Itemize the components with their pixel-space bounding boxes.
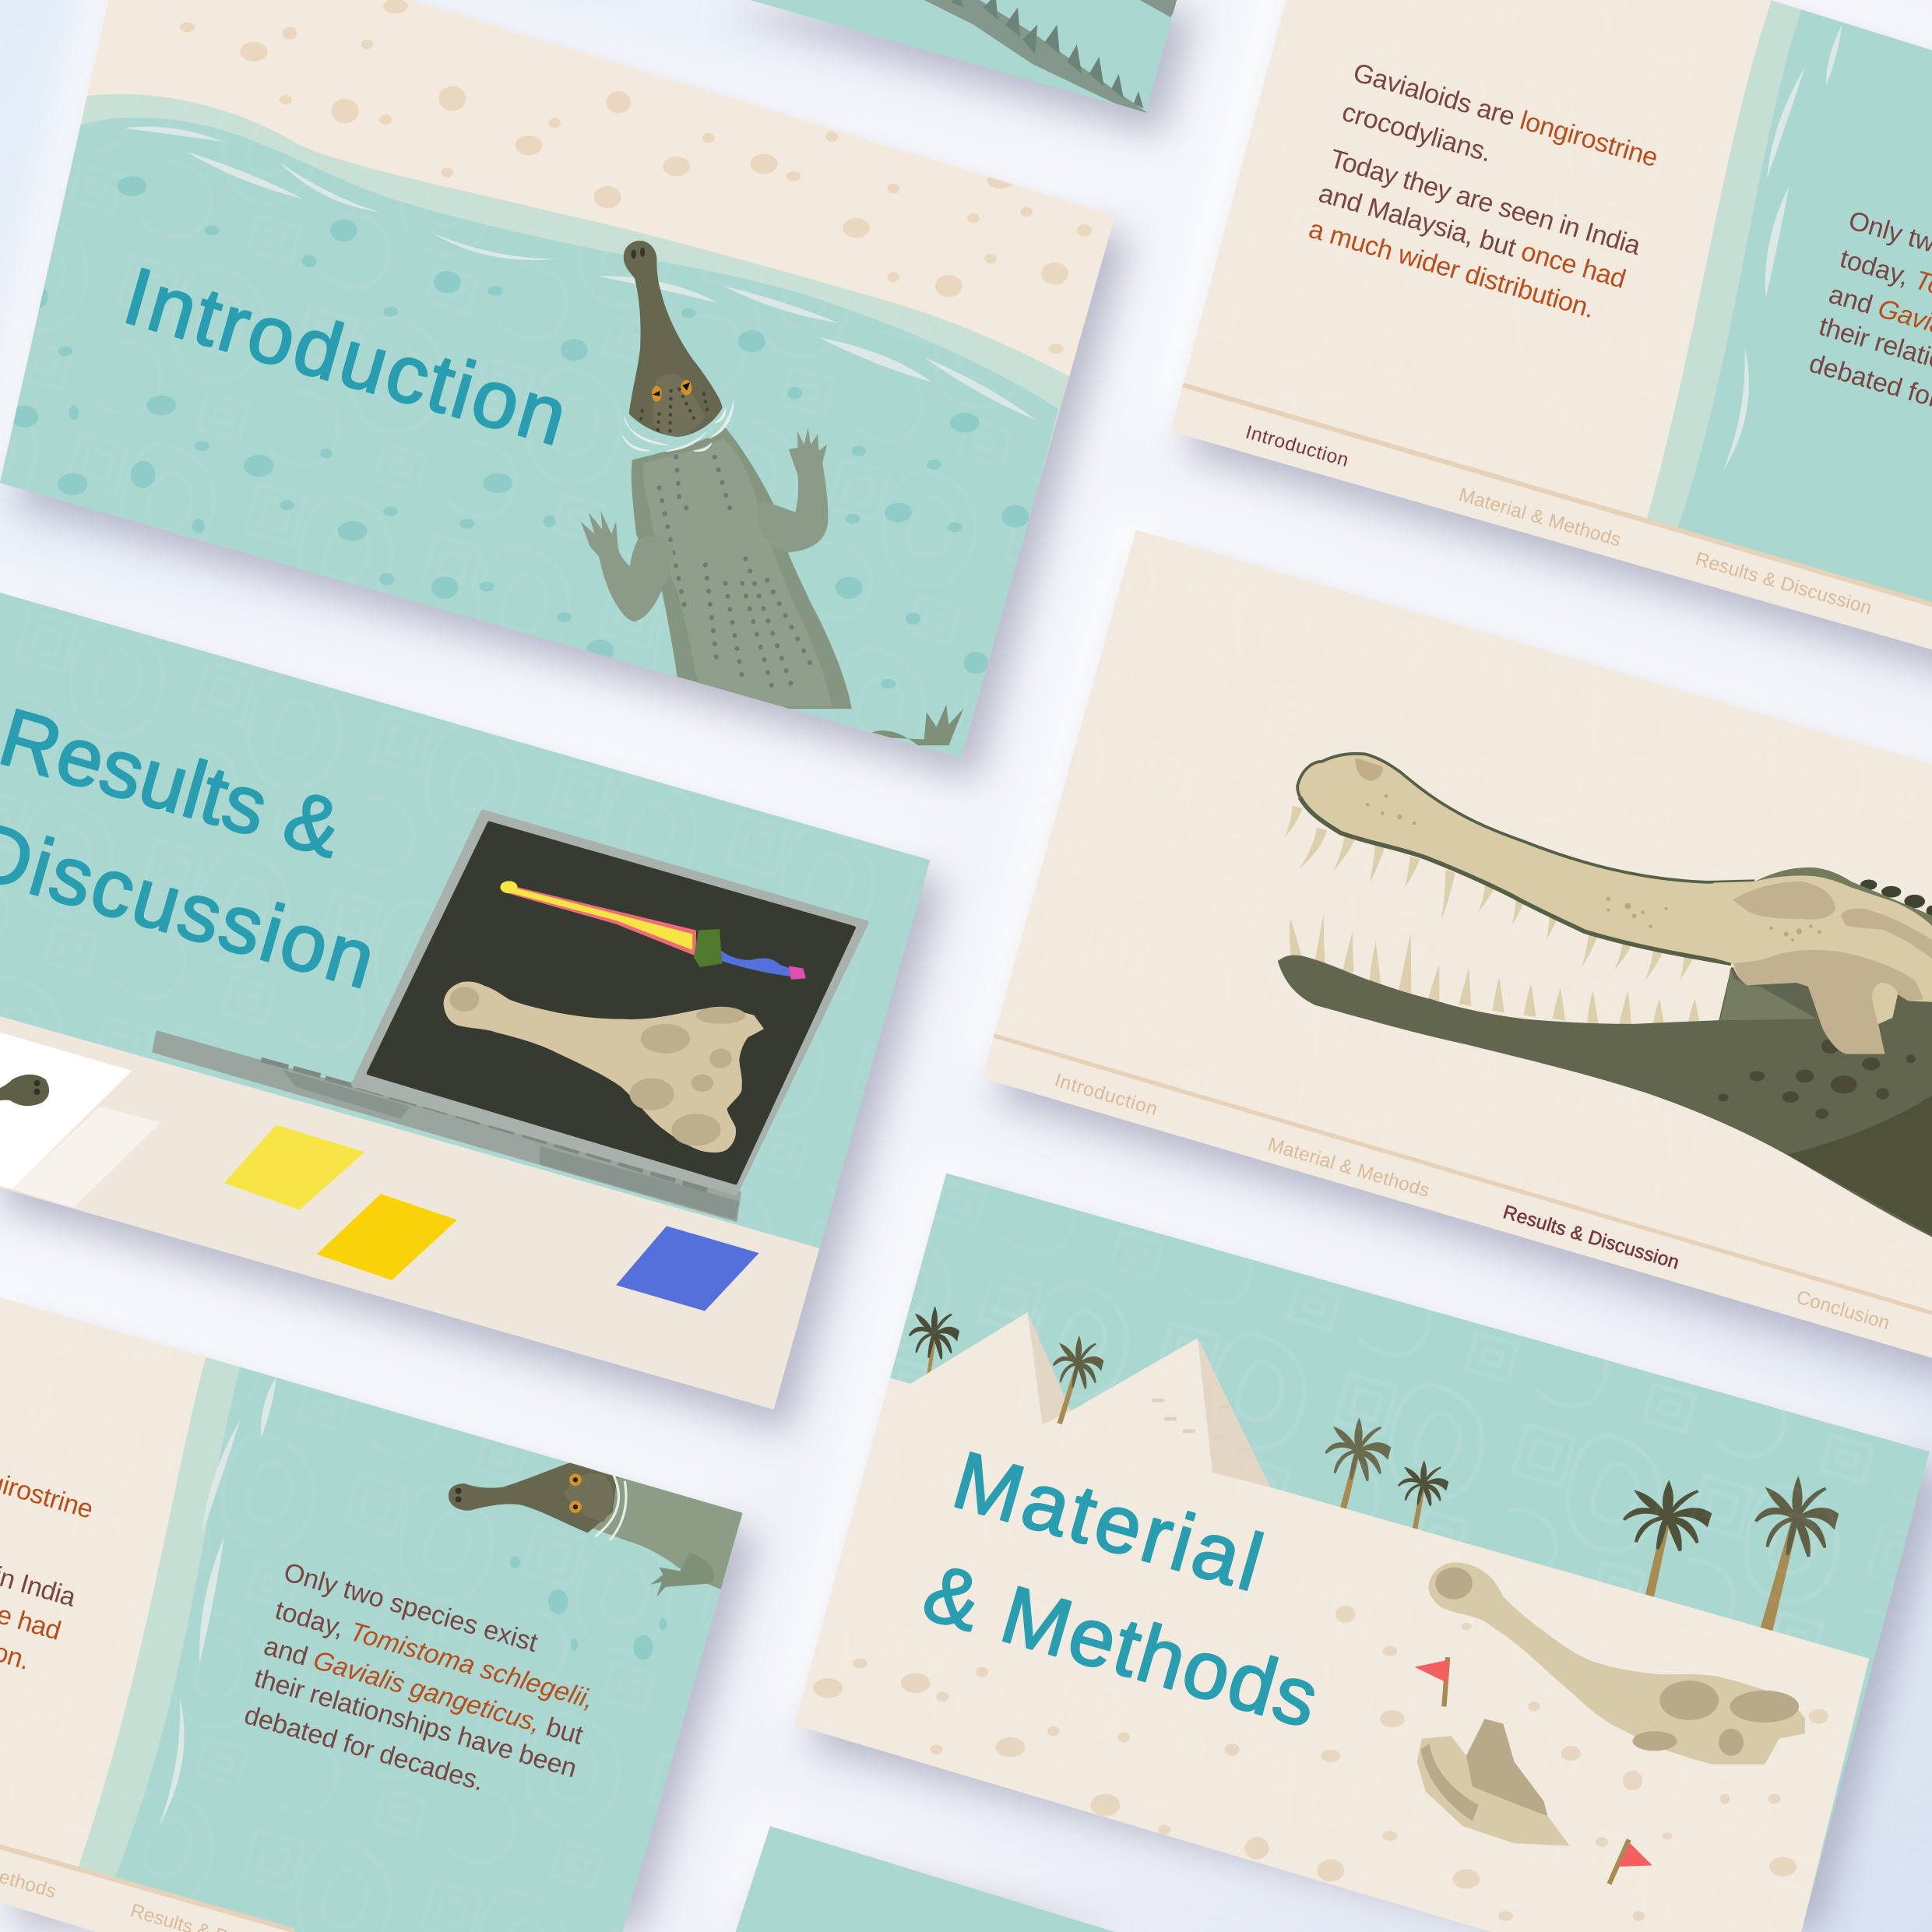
slide: Two species text: [0, 1287, 764, 1932]
illustration: rear foot: [863, 705, 963, 745]
palm tree in front of pyramids: [1054, 1338, 1103, 1424]
flag: left: [1414, 1657, 1449, 1706]
illustration: gharial head: [449, 1462, 743, 1597]
scutes: [1860, 880, 1932, 917]
small bone: [1417, 1719, 1570, 1846]
colour swatch: gold: [317, 1194, 457, 1280]
colour swatch: yellow: [224, 1125, 364, 1210]
illustration: swimming gharial: [581, 241, 852, 709]
footer navigation: [992, 1035, 1932, 1334]
laptop screen: [368, 823, 854, 1183]
arm: left: [581, 511, 673, 621]
slide: bottom sliver: [736, 1826, 1115, 1932]
water: [1644, 0, 1932, 690]
upper jaw: [1297, 754, 1774, 973]
text block: two species: [241, 1557, 597, 1797]
water ripples: [1723, 25, 1842, 472]
footer navigation: Introduction: [1052, 1070, 1160, 1120]
footer navigation: Material & Methods: [1265, 1134, 1432, 1202]
slide: Introduction: [0, 0, 1134, 776]
text block: left: Gavialoids are longirostrine: [1350, 58, 1661, 173]
palm trees: [910, 1308, 1837, 1634]
title: Results &: [0, 691, 352, 875]
text block: left: [0, 1409, 97, 1676]
skull and neck detail: [1606, 867, 1932, 1244]
text block: right: [1806, 206, 1932, 445]
water ripples: [123, 127, 1036, 421]
water: [1, 93, 1070, 497]
text block: two species: Only two species exist: [280, 1557, 541, 1658]
footer navigation: Results & Discussion: [1693, 548, 1874, 619]
sand pebbles: [813, 1606, 1828, 1921]
sand ground: [0, 1013, 819, 1409]
text block: left: a much wider distribution.: [1306, 214, 1598, 324]
colour swatch: blue: [616, 1226, 759, 1311]
water pebbles: [11, 176, 1029, 688]
title: [0, 691, 385, 1006]
text block: two species: today, Tomistoma schlegelii,: [272, 1596, 597, 1715]
slide: Results & Discussion: [0, 579, 948, 1417]
slide: top sliver with crocodile tail: [751, 0, 1177, 114]
text block: two species: their relationships have been: [251, 1663, 580, 1783]
arm: right: [757, 428, 828, 552]
text block: left: Today they are seen in India: [1326, 144, 1644, 261]
sand ground: [795, 1312, 1869, 1932]
water ripples: [159, 1378, 276, 1826]
bone: [444, 981, 764, 1153]
slide: skull illustration: [973, 523, 1932, 1374]
footer navigation: Conclusion: [1794, 1286, 1892, 1334]
flag: right: [1609, 1839, 1652, 1884]
white card with snout: [0, 1029, 160, 1208]
coloured bone segmentation: [500, 881, 806, 980]
footer navigation: Introduction: [1243, 422, 1351, 471]
laptop: [154, 812, 866, 1219]
head: [624, 241, 723, 437]
pyramids: [1028, 1312, 1270, 1487]
title: & Methods: [914, 1547, 1328, 1745]
footer navigation: Material & Methods: [1456, 484, 1623, 551]
large bone: [1429, 1562, 1805, 1765]
title: Material: [944, 1434, 1272, 1609]
icon: crocodile tail: [924, 0, 1149, 114]
footer navigation: [1170, 379, 1932, 764]
text block: left: and Malaysia, but once had: [1315, 178, 1629, 294]
text block: two species: and Gavialis gangeticus, but: [261, 1631, 586, 1751]
slide: Material & Methods: [789, 1164, 1932, 1932]
title: [914, 1434, 1328, 1745]
sand pebbles: [180, 0, 1092, 354]
title: Introduction: [114, 250, 577, 463]
text block: two species: debated for decades.: [241, 1700, 487, 1797]
footer navigation: [0, 1836, 296, 1932]
lower jaw: [1278, 955, 1932, 1257]
text block: left: [1306, 58, 1661, 324]
footer navigation: Results & Discussion: [1501, 1202, 1681, 1274]
water: [76, 1353, 751, 1932]
text block: left: crocodylians.: [1339, 97, 1495, 168]
slide: Gavialoids text: [1158, 0, 1932, 764]
teeth: [1284, 806, 1700, 1026]
